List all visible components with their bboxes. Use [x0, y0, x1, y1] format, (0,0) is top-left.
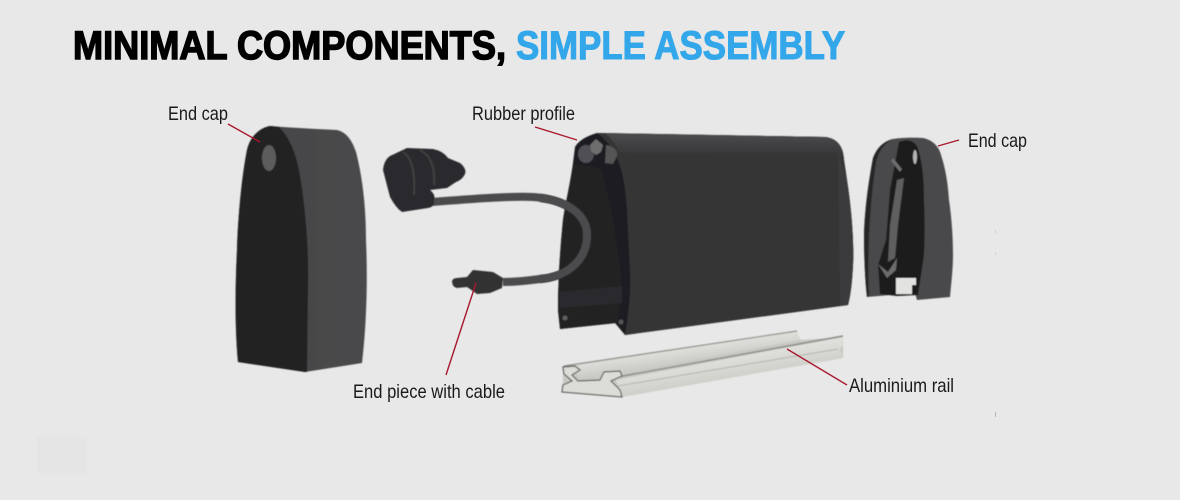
- lower tube: [616, 337, 844, 397]
- leader lines: [228, 124, 959, 385]
- white clip: [896, 278, 916, 294]
- cap interior: [878, 140, 925, 296]
- label: aluminium rail: Aluminium rail: [849, 375, 954, 397]
- title: MINIMAL COMPONENTS,: [73, 24, 506, 68]
- upper tube: [573, 332, 801, 380]
- cable: [432, 197, 587, 282]
- rubber profile: [540, 133, 853, 335]
- label: end cap left: End cap: [168, 103, 228, 125]
- labels: [168, 103, 1027, 403]
- label: rubber profile: Rubber profile: [472, 103, 575, 125]
- rail cross-section: [562, 366, 622, 397]
- cap screw hole: [262, 145, 276, 171]
- left end cap: [236, 126, 367, 372]
- cable in front of profile: [540, 198, 587, 279]
- rubber channel: [578, 145, 594, 163]
- title: [73, 24, 845, 68]
- right end cap: [864, 138, 953, 300]
- label: end piece with cable: End piece with cable: [353, 381, 505, 403]
- end piece with cable: [383, 148, 587, 294]
- title: SIMPLE ASSEMBLY: [516, 24, 845, 68]
- cable end connector: [452, 270, 503, 294]
- main front face: [597, 133, 853, 335]
- connector plug: [383, 148, 465, 212]
- aluminium rail: [562, 331, 844, 397]
- label: end cap right: End cap: [968, 130, 1027, 152]
